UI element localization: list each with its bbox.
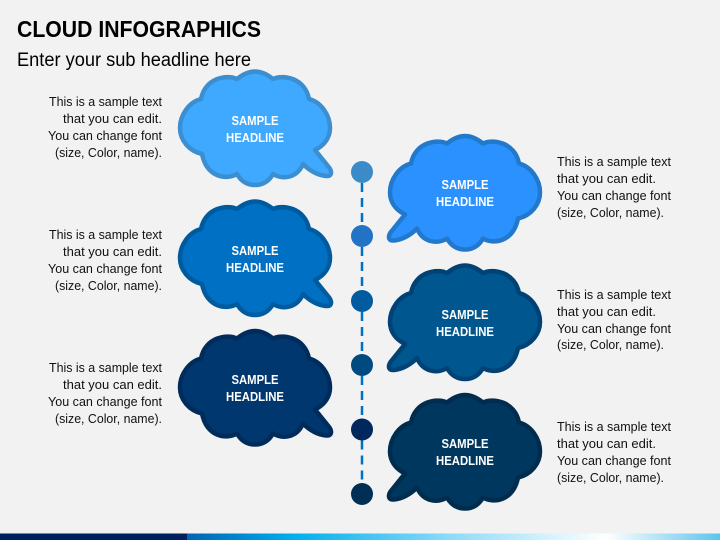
text block left 2 <box>48 227 162 293</box>
text block right 1: You can change font <box>557 188 671 203</box>
text block right 2: You can change font <box>557 321 671 336</box>
subtitle: Enter your sub headline here <box>17 50 251 71</box>
text block left 3: This is a sample text <box>49 360 162 375</box>
title: CLOUD INFOGRAPHICS <box>17 16 261 42</box>
cloud 2 <box>389 136 540 250</box>
text block left 3 <box>48 360 162 426</box>
text block right 3: This is a sample text <box>557 419 671 434</box>
footer bar <box>0 534 720 540</box>
text block left 2: You can change font <box>48 261 162 276</box>
text block left 1 <box>48 94 162 160</box>
cloud 4: HEADLINE <box>436 324 494 339</box>
text block right 3 <box>557 419 671 485</box>
cloud 1 <box>180 72 331 185</box>
text block left 3: (size, Color, name). <box>55 411 162 426</box>
cloud 3 <box>180 202 331 315</box>
text block left 2: This is a sample text <box>49 227 162 242</box>
text block right 1: that you can edit. <box>557 171 656 186</box>
text block left 3: You can change font <box>48 394 162 409</box>
text block left 2: that you can edit. <box>63 244 162 259</box>
cloud 2: HEADLINE <box>436 194 494 209</box>
text block left 1: (size, Color, name). <box>55 145 162 160</box>
cloud 3: SAMPLE <box>232 243 279 258</box>
cloud 6: HEADLINE <box>436 453 494 468</box>
text block right 2: (size, Color, name). <box>557 337 664 352</box>
text block left 1: You can change font <box>48 128 162 143</box>
text block right 1: (size, Color, name). <box>557 205 664 220</box>
text block right 3: (size, Color, name). <box>557 470 664 485</box>
cloud 4 <box>389 266 540 379</box>
text block left 1: that you can edit. <box>63 111 162 126</box>
cloud 6 <box>389 395 540 508</box>
text block right 2 <box>557 287 671 352</box>
cloud 6: SAMPLE <box>442 436 489 451</box>
text block left 3: that you can edit. <box>63 377 162 392</box>
cloud 5: SAMPLE <box>232 372 279 387</box>
text block right 2: This is a sample text <box>557 287 671 302</box>
text block left 1: This is a sample text <box>49 94 162 109</box>
cloud 5: HEADLINE <box>226 389 284 404</box>
cloud 2: SAMPLE <box>442 177 489 192</box>
cloud 5 <box>180 331 331 444</box>
text block right 3: that you can edit. <box>557 436 656 451</box>
text block right 3: You can change font <box>557 453 671 468</box>
text block right 1: This is a sample text <box>557 154 671 169</box>
text block right 2: that you can edit. <box>557 304 656 319</box>
cloud 1: HEADLINE <box>226 130 284 145</box>
timeline <box>351 161 373 505</box>
cloud 4: SAMPLE <box>442 307 489 322</box>
text block right 1 <box>557 154 671 220</box>
cloud 3: HEADLINE <box>226 260 284 275</box>
text block left 2: (size, Color, name). <box>55 278 162 293</box>
cloud 1: SAMPLE <box>232 113 279 128</box>
